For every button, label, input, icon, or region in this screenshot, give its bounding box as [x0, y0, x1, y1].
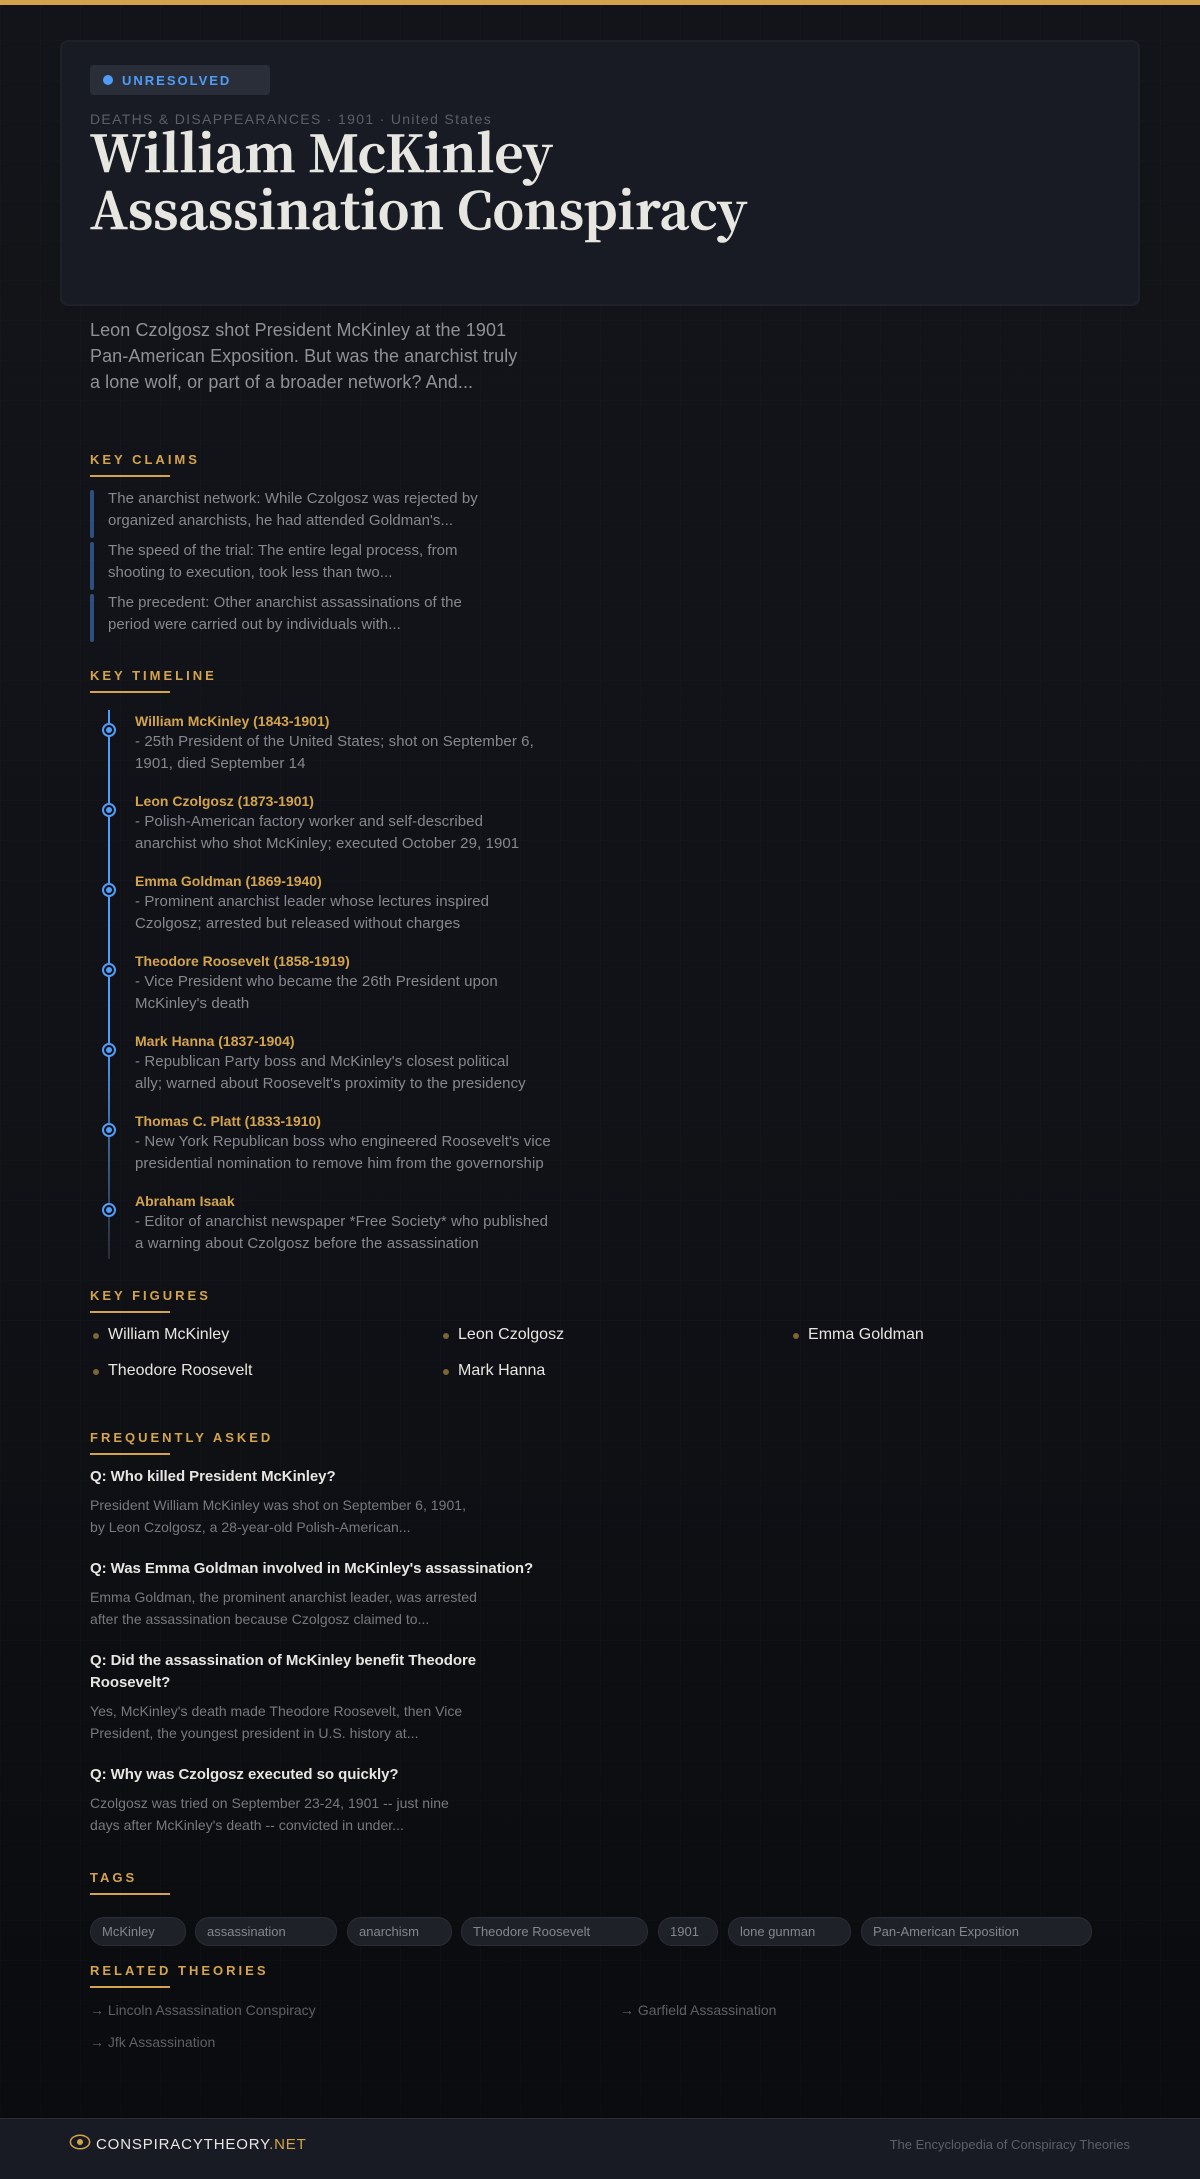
timeline node 7 [102, 1203, 116, 1217]
footer brand: CONSPIRACYTHEORY.NET [96, 2136, 307, 2153]
figure: Leon Czolgosz: Leon Czolgosz [458, 1326, 564, 1343]
timeline entry 5: - Republican Party boss and McKinley's closest political [135, 1053, 509, 1070]
timeline entry 3: Czolgosz; arrested but released without charges [135, 915, 460, 932]
timeline entry 2: anarchist who shot McKinley; executed October 29, 1901 [135, 835, 519, 852]
tag: Pan-American Exposition [861, 1917, 1092, 1946]
timeline entry 1: - 25th President of the United States; shot on September 6, [135, 733, 534, 750]
figure: Emma Goldman: Emma Goldman [808, 1326, 924, 1343]
timeline entry 7: a warning about Czolgosz before the assassination [135, 1235, 479, 1252]
figure: Mark Hanna: Mark Hanna [458, 1362, 545, 1379]
panel: key claims [90, 490, 478, 642]
timeline entry 3: Emma Goldman (1869-1940) [135, 873, 322, 889]
title: Assassination Conspiracy [90, 171, 747, 244]
timeline entry 4: Theodore Roosevelt (1858-1919) [135, 953, 350, 969]
tag: assassination: assassination [207, 1924, 286, 1939]
timeline entry 6 [135, 1113, 551, 1172]
timeline node 2 [102, 803, 116, 817]
claim 1: organized anarchists, he had attended Goldman's... [108, 512, 453, 529]
tag: 1901 [658, 1917, 718, 1946]
timeline entry 1: William McKinley (1843-1901) [135, 713, 329, 729]
icon: eye logo [70, 2134, 90, 2150]
timeline entry 5: Mark Hanna (1837-1904) [135, 1033, 295, 1049]
timeline node 5 [102, 1043, 116, 1057]
faq 4 [90, 1766, 449, 1833]
claim 1: The anarchist network: While Czolgosz was rejected by [108, 490, 478, 507]
heading: key timeline: KEY TIMELINE [90, 668, 217, 683]
timeline spine [108, 710, 110, 1259]
tag: Pan-American Exposition: Pan-American Exposition [873, 1924, 1019, 1939]
faq 3: Roosevelt? [90, 1674, 170, 1691]
summary text: Pan-American Exposition. But was the anarchist truly [90, 346, 517, 366]
tag: lone gunman: lone gunman [740, 1924, 815, 1939]
timeline entry 6: Thomas C. Platt (1833-1910) [135, 1113, 321, 1129]
timeline entry 3: - Prominent anarchist leader whose lectures inspired [135, 893, 489, 910]
faq 4: days after McKinley's death -- convicted in under... [90, 1817, 404, 1833]
timeline entry 6: presidential nomination to remove him from the governorship [135, 1155, 544, 1172]
tag: Theodore Roosevelt: Theodore Roosevelt [473, 1924, 590, 1939]
timeline entry 2: Leon Czolgosz (1873-1901) [135, 793, 314, 809]
status badge [90, 65, 270, 95]
claim 3: period were carried out by individuals with... [108, 616, 401, 633]
claim 3: The precedent: Other anarchist assassinations of the [108, 594, 462, 611]
timeline entry 4: - Vice President who became the 26th President upon [135, 973, 498, 990]
panel: header card [60, 40, 1140, 306]
summary text: Leon Czolgosz shot President McKinley at the 1901 [90, 320, 506, 340]
timeline entry 2: - Polish-American factory worker and self-described [135, 813, 483, 830]
faq 3 [90, 1652, 476, 1741]
related: Garfield: → Garfield Assassination [620, 2002, 776, 2018]
faq 1: President William McKinley was shot on September 6, 1901, [90, 1497, 466, 1513]
tag: anarchism [347, 1917, 452, 1946]
faq 2 [90, 1560, 533, 1627]
tag: McKinley [90, 1917, 186, 1946]
timeline entry 7: Abraham Isaak [135, 1193, 235, 1209]
summary text: a lone wolf, or part of a broader network? And... [90, 372, 473, 392]
related: JFK: → Jfk Assassination [90, 2034, 215, 2050]
timeline entry 1 [135, 713, 534, 772]
tag: Theodore Roosevelt [461, 1917, 648, 1946]
heading: frequently asked: FREQUENTLY ASKED [90, 1430, 273, 1445]
title [90, 114, 748, 244]
faq 1: Q: Who killed President McKinley? [90, 1468, 336, 1485]
footer tagline: The Encyclopedia of Conspiracy Theories [890, 2137, 1130, 2152]
timeline entry 6: - New York Republican boss who engineered Roosevelt's vice [135, 1133, 551, 1150]
timeline entry 3 [135, 873, 489, 932]
timeline entry 7: - Editor of anarchist newspaper *Free Society* who published [135, 1213, 548, 1230]
faq 2: after the assassination because Czolgosz claimed to... [90, 1611, 429, 1627]
heading: related theories: RELATED THEORIES [90, 1963, 268, 1978]
faq 3: Yes, McKinley's death made Theodore Roosevelt, then Vice [90, 1703, 462, 1719]
heading: tags: TAGS [90, 1870, 137, 1885]
tag: anarchism: anarchism [359, 1924, 419, 1939]
timeline entry 1: 1901, died September 14 [135, 755, 306, 772]
timeline node 1 [102, 723, 116, 737]
tag: 1901: 1901 [670, 1924, 699, 1939]
tag: assassination [195, 1917, 337, 1946]
timeline entry 5 [135, 1033, 526, 1092]
related: Lincoln: → Lincoln Assassination Conspiracy [90, 2002, 316, 2018]
timeline node 3 [102, 883, 116, 897]
claim 2 [90, 542, 458, 590]
timeline entry 4: McKinley's death [135, 995, 249, 1012]
faq 1: by Leon Czolgosz, a 28-year-old Polish-American... [90, 1519, 411, 1535]
timeline node 6 [102, 1123, 116, 1137]
top accent bar [0, 0, 1200, 5]
heading: key figures: KEY FIGURES [90, 1288, 211, 1303]
faq 2: Emma Goldman, the prominent anarchist leader, was arrested [90, 1589, 477, 1605]
timeline node 4 [102, 963, 116, 977]
faq 2: Q: Was Emma Goldman involved in McKinley's assassination? [90, 1560, 533, 1577]
timeline entry 2 [135, 793, 519, 852]
tag: McKinley: McKinley [102, 1924, 155, 1939]
timeline entry 7 [135, 1193, 548, 1252]
timeline entry 5: ally; warned about Roosevelt's proximity to the presidency [135, 1075, 526, 1092]
badge label: UNRESOLVED [122, 73, 231, 88]
title: William McKinley [90, 114, 553, 187]
claim 2: The speed of the trial: The entire legal process, from [108, 542, 458, 559]
faq 4: Czolgosz was tried on September 23-24, 1901 -- just nine [90, 1795, 449, 1811]
timeline chart [108, 710, 110, 1259]
icon: status dot [103, 75, 113, 85]
faq 4: Q: Why was Czolgosz executed so quickly? [90, 1766, 398, 1783]
faq 1 [90, 1468, 466, 1535]
footer bar [0, 2118, 1200, 2179]
figure: Theodore Roosevelt: Theodore Roosevelt [108, 1362, 252, 1379]
summary text [90, 320, 518, 392]
claim 3 [90, 594, 462, 642]
faq 3: President, the youngest president in U.S. history at... [90, 1725, 418, 1741]
heading: key claims: KEY CLAIMS [90, 452, 200, 467]
timeline entry 4 [135, 953, 498, 1012]
tag: lone gunman [728, 1917, 851, 1946]
claim 2: shooting to execution, took less than two... [108, 564, 392, 581]
category meta line: DEATHS & DISAPPEARANCES · 1901 · United States [90, 111, 492, 127]
faq 3: Q: Did the assassination of McKinley benefit Theodore [90, 1652, 476, 1669]
figure: William McKinley: William McKinley [108, 1326, 229, 1343]
claim 1 [90, 490, 478, 538]
